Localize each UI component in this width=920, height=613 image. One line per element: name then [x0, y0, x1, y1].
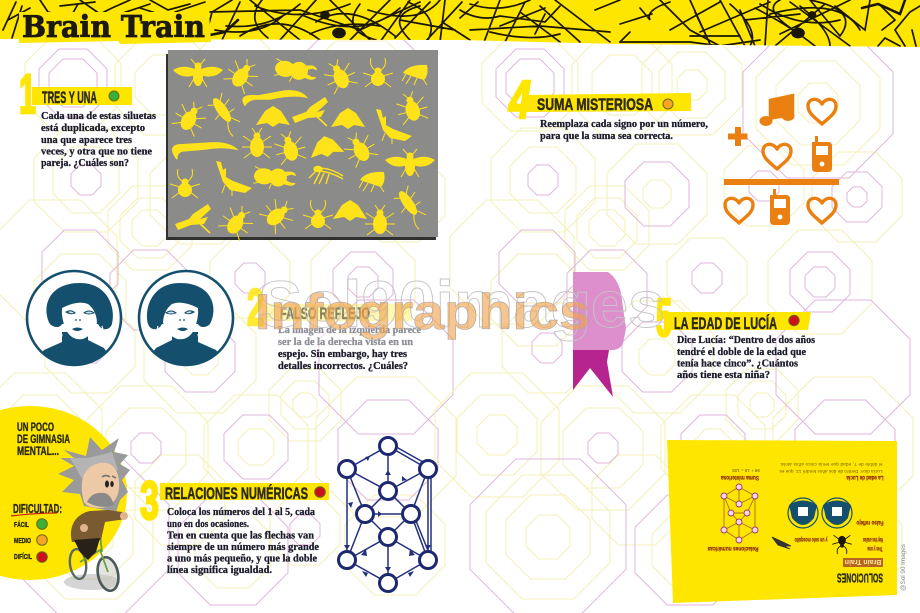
heading: un poco de gimnasia mental: DE GIMNASIA — [17, 432, 70, 446]
panel: soluciones (upside down): el doble de 7, edad que tenía cinco años atrás. — [780, 462, 882, 467]
panel: soluciones (upside down): 98 + 19 = 105 — [732, 468, 760, 473]
section 1: Tres y una — [19, 62, 156, 169]
watermark: infographics: Sol90images — [258, 267, 665, 341]
section 2: Falso reflejo: ser la de la derecha vista en un — [278, 336, 413, 348]
icon: music note — [770, 95, 793, 120]
section 5: La edad de Lucia: tenía hace cinco”. ¿Cuántos — [677, 358, 798, 370]
section 3: Relaciones numericas: uno en dos ocasiones. — [167, 518, 249, 530]
header band with black scribbles — [0, 0, 920, 47]
section 3: Relaciones numericas: 3 — [140, 471, 159, 531]
panel: soluciones (upside down) — [667, 440, 897, 603]
section 2: Falso reflejo — [247, 279, 421, 372]
section 5: La edad de Lucia: 5 — [656, 288, 672, 348]
heading: un poco de gimnasia mental: UN POCO — [17, 420, 54, 434]
title: Brain Train: Brain Train — [22, 10, 205, 45]
insects — [170, 53, 435, 242]
section 2: Falso reflejo: FALSO REFLEJO — [280, 304, 370, 323]
section 1: Tres y una: una que aparece tres — [41, 134, 132, 146]
section 2: Falso reflejo: espejo. Sin embargo, hay tres — [278, 348, 407, 360]
watermark: infographics: Infographics — [255, 284, 590, 340]
section 1: Tres y una: Cada una de estas siluetas — [41, 110, 156, 122]
number 1: 1 — [19, 62, 36, 125]
section 3: Relaciones numericas: siempre de un número más grande — [167, 541, 319, 553]
icon: mosquito — [772, 537, 791, 549]
section 3: Relaciones numericas: Coloca los números del 1 al 5, cada — [167, 506, 316, 518]
panel: soluciones (upside down): Suma misteriosa — [721, 474, 759, 481]
section 4: Suma misteriosa: SUMA MISTERIOSA — [537, 95, 653, 114]
section 5: La edad de Lucia: LA EDAD DE LUCÍA — [674, 314, 777, 333]
section 1: Tres y una: está duplicada, excepto — [41, 122, 145, 134]
heading: soluciones: SOLUCIONES — [837, 570, 883, 586]
section 4: Suma misteriosa: Reemplaza cada signo por un número, — [540, 118, 708, 130]
section 2: Falso reflejo: La imagen de la izquierda parece — [278, 324, 421, 336]
credit line: @Sol 90 Images — [900, 543, 907, 591]
icon: girl profile silhouette — [573, 272, 626, 397]
section 2: Falso reflejo: detalles incorrectos. ¿Cuáles? — [278, 360, 408, 372]
heading: un poco de gimnasia mental — [17, 420, 70, 458]
diagram: number graph — [338, 438, 436, 592]
panel: soluciones (upside down): La edad de Lucía — [846, 474, 884, 481]
mirror faces illustration — [27, 271, 233, 365]
legend: dificultad: DIFÍCIL — [14, 552, 32, 561]
panel: soluciones (upside down): Lucía dice: Dentro de dos años tendré 12, que es — [779, 469, 882, 474]
section 5: La edad de Lucia: años tiene esta niña? — [677, 369, 770, 381]
legend: dificultad: FÁCIL — [14, 520, 29, 529]
section 3: Relaciones numericas: línea significa igualdad. — [167, 564, 272, 576]
section 3: Relaciones numericas: Ten en cuenta que las flechas van — [167, 530, 314, 542]
legend: dificultad: DIFICULTAD: — [13, 502, 62, 516]
section 1: Tres y una: TRES Y UNA — [42, 88, 97, 107]
section 1: Tres y una: pareja. ¿Cuáles son? — [41, 157, 129, 169]
section 4: Suma misteriosa — [508, 70, 708, 142]
section 5: La edad de Lucia: tendré el doble de la edad que — [677, 346, 806, 358]
yellow circle: dificultad — [0, 406, 127, 580]
panel: soluciones (upside down): Falso reflejo — [856, 519, 884, 526]
icon: Einstein on a bicycle — [58, 437, 130, 593]
panel: soluciones (upside down): Tres y una — [867, 545, 882, 552]
icon: spider — [832, 535, 852, 554]
puzzle: icon sum — [724, 95, 839, 225]
section 3: Relaciones numericas — [140, 471, 329, 576]
solution faces — [788, 498, 852, 528]
panel: soluciones (upside down): Hay tres arañas — [863, 536, 883, 542]
section 1: Tres y una: veces, y otra que no tiene — [41, 146, 152, 158]
heading: un poco de gimnasia mental: MENTAL... — [17, 444, 59, 458]
solution graph — [721, 484, 758, 543]
legend: dificultad — [11, 502, 62, 562]
section 4: Suma misteriosa: 4 — [508, 70, 531, 130]
legend: dificultad: MEDIO — [14, 536, 31, 545]
section 2: Falso reflejo: 2 — [247, 279, 264, 337]
section 4: Suma misteriosa: para que la suma sea correcta. — [540, 130, 673, 142]
panel: soluciones (upside down): y un solo mosquito — [794, 536, 828, 542]
panel: soluciones (upside down): Relaciones numéricas — [707, 545, 758, 552]
label: brain train: Brain Train — [845, 558, 881, 565]
section 3: Relaciones numericas: a uno más pequeño, y que la doble — [167, 552, 317, 564]
section 5: La edad de Lucia — [656, 288, 815, 381]
section 5: La edad de Lucia: Dice Lucía: “Dentro de dos años — [677, 334, 815, 346]
section 3: Relaciones numericas: RELACIONES NUMÉRICAS — [165, 484, 308, 503]
panel: insects silhouettes — [166, 50, 438, 242]
